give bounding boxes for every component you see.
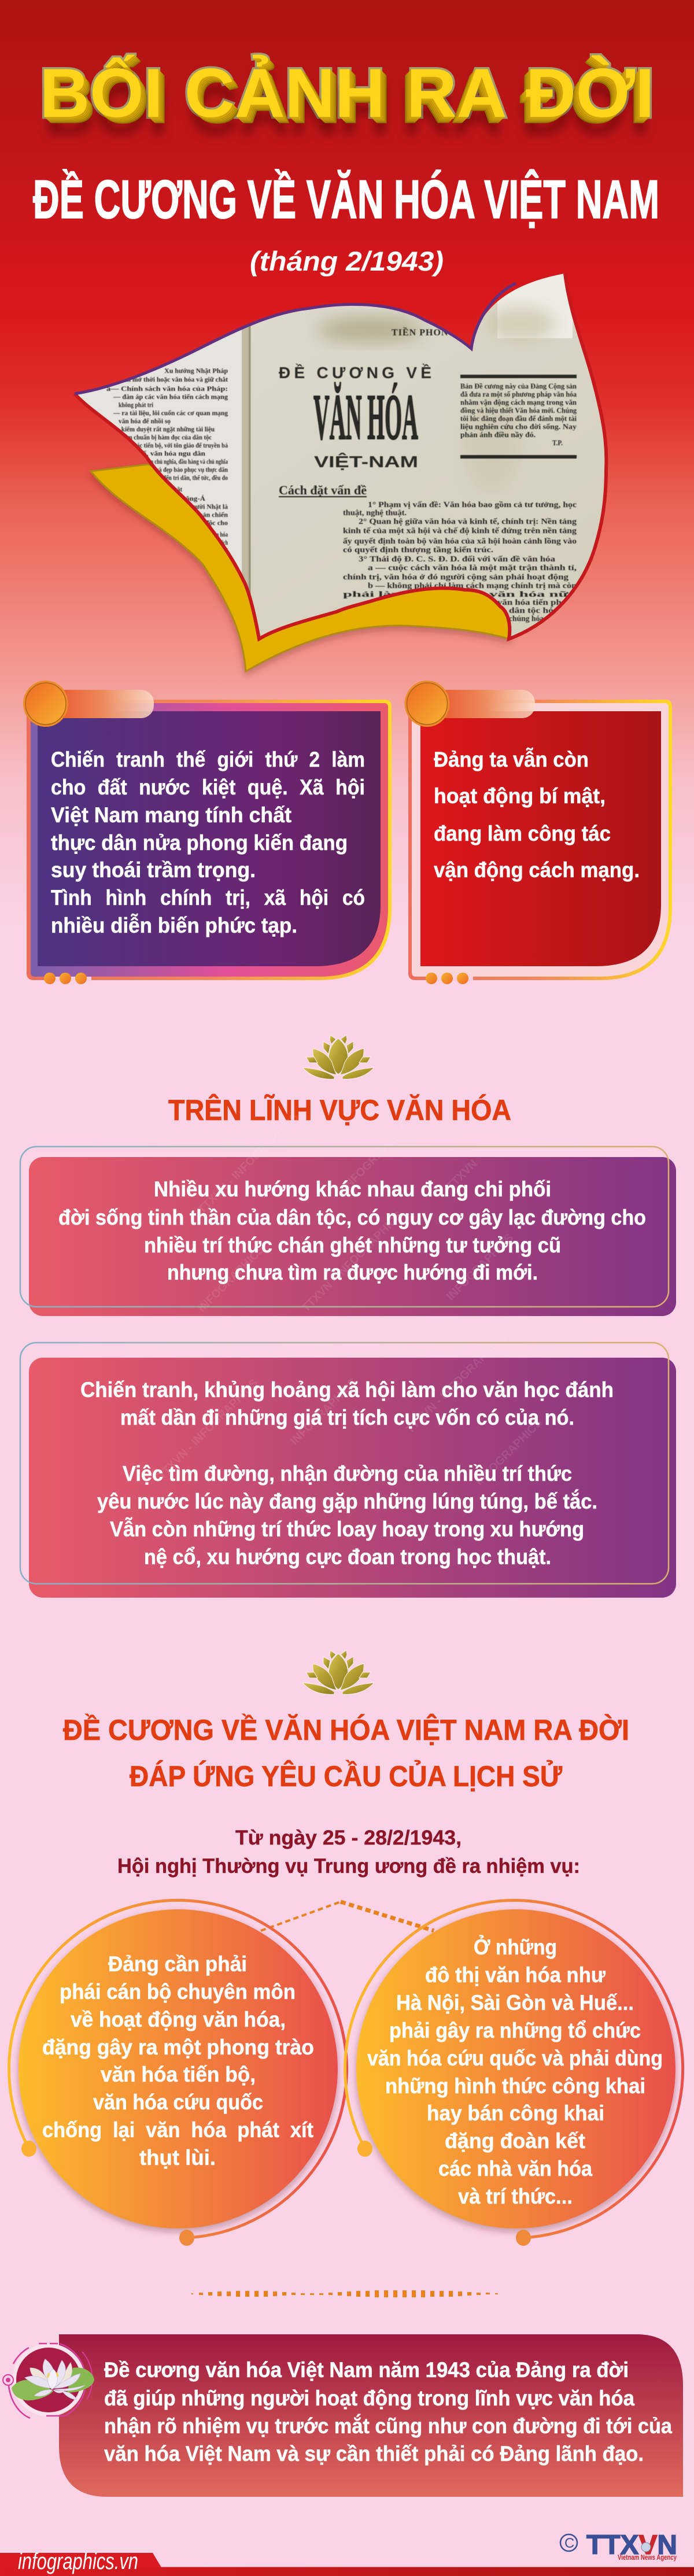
- newspaper scan: kinh tế của một xã hội và chế độ kinh tế đứng trên nền tảng: [343, 526, 577, 535]
- newspaper scan: — ra tài liệu, lôi cuốn các cơ quan mạng: [113, 409, 228, 417]
- circle text: [367, 1935, 663, 2208]
- newspaper scan: Bản Đề cương này của Đảng Cộng sản: [460, 382, 577, 390]
- watermark: [195, 1111, 516, 1315]
- card body: [420, 711, 661, 966]
- date line: (tháng 2/1943): [250, 246, 444, 276]
- newspaper scan: chúng hóa vận động: [509, 614, 577, 623]
- newspaper scan: a— Chính sách văn hóa của Pháp:: [106, 385, 228, 393]
- newspaper scan: văn hóa để nhồi sọ: [119, 417, 171, 425]
- card text: hoạt động bí mật,: [434, 784, 606, 808]
- card text: Việt Nam mang tính chất: [51, 803, 291, 827]
- card text: Đảng ta vẫn còn: [434, 748, 589, 771]
- card text: Chiến tranh thế giới thứ 2 làm: [51, 748, 365, 771]
- circle text: các nhà văn hóa: [438, 2157, 592, 2180]
- icon: orange coin: [405, 681, 450, 727]
- newspaper scan: văn hóa tiến phong: [497, 598, 577, 607]
- watermark: INFOGRAPHICS: [473, 1417, 545, 1488]
- circle text: phái cán bộ chuyên môn: [60, 1980, 296, 2004]
- circle text: đặng đoàn kết: [445, 2129, 585, 2153]
- newspaper scan: quảng và đẹp bảo phục vụ thực dân: [139, 465, 228, 474]
- newspaper scan: nhằm vận động cách mạng trong văn: [460, 398, 577, 406]
- watermark: TTXVN - INFOGRAPHICS: [404, 1330, 510, 1436]
- box text: nệ cổ, xu hướng cực đoan trong học thuật.: [144, 1545, 551, 1569]
- newspaper scan: mặt khác tiến bộ, với tôn giáo để truyền bá: [119, 441, 228, 449]
- newspaper scan: mất văn hóa chí: [200, 555, 228, 563]
- newspaper scan: — kiểm duyệt rất ngặt những tài liệu: [113, 425, 215, 433]
- newspaper scan: Cách đặt vấn đề: [279, 483, 367, 497]
- newspaper scan: VIỆT-NAM: [314, 453, 418, 471]
- newspaper scan: dân tộc hóa, đại: [509, 606, 577, 615]
- box text: [58, 1177, 646, 1284]
- card text: [51, 748, 365, 937]
- newspaper scan: nghi, mất nghệ: [200, 546, 228, 555]
- box text: [80, 1378, 614, 1569]
- connector: dashed peak between circles: [261, 1902, 434, 1931]
- logo: TTXVN: C: [564, 2536, 574, 2551]
- box text: Nhiều xu hướng khác nhau đang chi phối: [154, 1177, 551, 1201]
- newspaper scan: 3° Thái độ Đ. C. S. Đ. D. đối với vấn đề văn hóa: [359, 555, 555, 563]
- circle text: Hà Nội, Sài Gòn và Huế...: [396, 1991, 634, 2015]
- newspaper scan: truyền chủ nghĩa, đầu hàng và chủ nghĩa: [139, 457, 228, 465]
- conclusion text: Đề cương văn hóa Việt Nam năm 1943 của Đảng ra đời: [104, 2358, 629, 2382]
- card frame: [408, 700, 672, 980]
- newspaper scan: phải mở thời hoặc văn hóa và giữ chắt: [118, 375, 228, 383]
- newspaper scan: tộc, cổng: [205, 563, 228, 571]
- icon: three dots: [44, 973, 87, 984]
- newspaper scan: văn hóa Nhật-bản chiến: [156, 511, 228, 519]
- newspaper scan: b — không phải chỉ làm cách mạng chính trị mà còn: [368, 581, 577, 590]
- card text: thực dân nửa phong kiến đang: [51, 831, 348, 855]
- newspaper scan: có quyết định thượng tầng kiến trúc.: [343, 545, 493, 554]
- watermark: TTXVN - INFOGRAPHICS: [195, 1111, 301, 1217]
- circle text: văn hóa tiến bộ,: [101, 2063, 256, 2086]
- logo: TTXVN: TTXVN: [586, 2529, 677, 2560]
- newspaper scan: 1° Phạm vị vấn đề: Văn hóa bao gồm cả tư tưởng, học: [368, 500, 577, 509]
- circle text: đặng gây ra một phong trào: [42, 2035, 314, 2059]
- tab: scroll bar: [52, 690, 154, 718]
- ring arc: [9, 1900, 347, 2238]
- circle text: đô thị văn hóa như: [425, 1963, 606, 1987]
- newspaper scan: nhân dân đến tri dân, thế tức, đều do: [139, 474, 228, 482]
- lily pads: [12, 2367, 94, 2400]
- newspaper scan: liệu nghiên cứu cho đời sống. Nay: [460, 423, 577, 431]
- newspaper scan: đặc phong cổ lịch: [194, 538, 228, 546]
- newspaper scan: đồng và hiệu thiết Văn hóa mới. Chúng: [460, 406, 577, 415]
- circle text: [42, 1952, 314, 2170]
- newspaper scan: không phát tri: [119, 401, 154, 409]
- newspaper scan: ĐỀ CƯƠNG VỀ: [279, 364, 431, 382]
- circle text: hay bán công khai: [427, 2101, 604, 2125]
- newspaper scan: Xu hướng Nhật Pháp: [164, 367, 228, 375]
- divider: tapered orange dots: [191, 2290, 498, 2297]
- icon: water lily badge: [3, 2344, 94, 2418]
- circle text: về hoạt động văn hóa,: [71, 2008, 286, 2031]
- box text: Việc tìm đường, nhận đường của nhiều trí thức: [123, 1462, 572, 1485]
- watermark: INFOGRAPHICS: [288, 1376, 360, 1448]
- box text: nhưng chưa tìm ra được hướng đi mới.: [167, 1261, 538, 1284]
- circle text: Đảng cần phải: [108, 1952, 247, 1976]
- tab: scroll bar: [434, 690, 535, 718]
- card text: vận động cách mạng.: [434, 858, 640, 882]
- icon: gold lotus: [302, 1035, 374, 1079]
- newspaper scan: mang cổ, văn hóa ngu dân: [119, 449, 205, 457]
- conclusion text: văn hóa Việt Nam và sự cần thiết phải có Đảng lãnh đạo.: [104, 2442, 644, 2466]
- card text: đang làm công tác: [434, 822, 611, 845]
- footer: red band and site tab: infographics.vn: [18, 2549, 138, 2574]
- conclusion text: [104, 2358, 672, 2466]
- panel: left task circle: [9, 1900, 347, 2246]
- box text: mất dần đi những giá trị tích cực vốn có của nó.: [120, 1406, 574, 1429]
- newspaper scan: hóa của Nhật: [147, 485, 182, 493]
- newspaper scan: T.P.: [552, 439, 563, 447]
- card text: [434, 748, 640, 882]
- watermark: [155, 1330, 545, 1488]
- newspaper scan: chính trị, văn hóa ở đó người cộng sản phải hoạt động: [343, 572, 569, 581]
- circle text: thụt lùi.: [139, 2146, 216, 2170]
- newspaper scan: — đàn áp các văn hóa tiến cách mạng: [113, 393, 228, 401]
- circle text: và trí thức...: [458, 2185, 573, 2208]
- card colour band: [31, 703, 388, 977]
- newspaper scan: 2° Quan hệ giữa văn hóa và kinh tế, chính trị: Nền tảng: [359, 517, 577, 526]
- card text: cho đất nước kiệt quệ. Xã hội: [51, 775, 365, 799]
- purple edge of the newspaper: [75, 283, 516, 394]
- newspaper scan: nghĩa Đại Đông-Á: [147, 494, 205, 502]
- panel: war impact box: [20, 1330, 676, 1598]
- heading: document birth: [63, 1714, 629, 1793]
- newspaper scan: chính: [208, 572, 228, 580]
- newspaper scan: a — cuộc cách văn hóa là một mặt trận thành tỉ,: [368, 563, 577, 572]
- card colour band: [412, 703, 669, 977]
- panel: right task circle: [345, 1900, 683, 2246]
- newspaper scan: nghệ nhận người Nhật là: [156, 502, 228, 511]
- intro text: conference: [117, 1827, 580, 1878]
- footer: red band and site tab: [0, 2549, 694, 2576]
- intro text: conference: Từ ngày 25 - 28/2/1943,: [235, 1827, 462, 1849]
- newspaper scan: — nêm chuẩn bị hàm đọc của dân tộc: [113, 433, 212, 441]
- box text: nhiều trí thức chán ghét những tư tưởng cũ: [144, 1233, 561, 1257]
- circle text: văn hóa cứu quốc và phải dùng: [367, 2046, 663, 2070]
- card text: nhiều diễn biến phức tạp.: [51, 914, 297, 937]
- heading: document birth: ĐỀ CƯƠNG VỀ VĂN HÓA VIỆT NAM RA ĐỜI: [63, 1714, 629, 1746]
- white lotus petals: [25, 2359, 85, 2400]
- newspaper scan: nhất, Đầu độc cho: [174, 519, 228, 527]
- heading: document birth: ĐÁP ỨNG YÊU CẦU CỦA LỊCH SỬ: [130, 1760, 562, 1793]
- circle text: chống lại văn hóa phát xít: [42, 2118, 313, 2142]
- newspaper scan: phản ánh điều nầy đó.: [460, 431, 536, 439]
- box text: Vẫn còn những trí thức loay hoay trong xu hướng: [110, 1517, 584, 1541]
- icon: three dots: [426, 973, 468, 984]
- card text: Tình hình chính trị, xã hội có: [51, 886, 365, 910]
- conclusion text: đã giúp những người hoạt động trong lĩnh vực văn hóa: [104, 2386, 634, 2410]
- newspaper scan: tôi lúc đăng đoạn đầu để đánh một tài: [460, 415, 577, 423]
- panel: conclusion: [59, 2334, 683, 2497]
- panel: trends box: [20, 1111, 676, 1316]
- notch in bottom stripe: [45, 977, 91, 981]
- card text: suy thoái trầm trọng.: [51, 858, 256, 882]
- box text: Chiến tranh, khủng hoảng xã hội làm cho văn học đánh: [80, 1378, 614, 1402]
- box text: đời sống tinh thần của dân tộc, có nguy cơ gây lạc đường cho: [58, 1206, 646, 1229]
- watermark: INFOGRAPHICS: [340, 1122, 412, 1193]
- newspaper scan: thuật, nghệ thuật.: [343, 508, 407, 517]
- watermark: INFOGRAPHICS: [195, 1243, 267, 1315]
- circle text: Ở những: [474, 1935, 557, 1959]
- card body: [38, 711, 381, 966]
- watermark: TTXVN - INFOGRAPHICS: [155, 1377, 261, 1483]
- watermark: TTXVN: [444, 1158, 480, 1193]
- newspaper scan: phải làm cách mạng văn hóa nữa: [343, 590, 577, 598]
- icon: orange coin: [23, 681, 68, 727]
- newspaper scan: [69, 269, 613, 645]
- newspaper scan: VĂN HÓA: [313, 382, 418, 453]
- panel: war context card: [23, 681, 392, 984]
- gold back page: [91, 464, 520, 671]
- title: 3D golden headline: BỐI CẢNH RA ĐỜI: [39, 54, 655, 132]
- notch in bottom stripe: [427, 977, 473, 981]
- newspaper scan: gọi tiêu văn hóa: [194, 530, 228, 538]
- illustration: newspaper page on gold and red book: [69, 269, 613, 671]
- newspaper scan: TIỀN PHONG: [392, 327, 456, 338]
- box text: yêu nước lúc này đang gặp những lúng túng, bế tắc.: [97, 1489, 597, 1513]
- ring end dots: [357, 2141, 531, 2246]
- card frame: [27, 700, 392, 980]
- watermark: TTXVN - INFOGRAPHICS: [300, 1209, 405, 1315]
- circle text: những hình thức công khai: [385, 2074, 645, 2098]
- circle text: phải gây ra những tổ chức: [389, 2019, 641, 2042]
- ring arc: [345, 1900, 683, 2238]
- red edge of the newspaper: [75, 274, 606, 639]
- panel: party context card: [405, 681, 672, 984]
- ring end dots: [21, 2141, 194, 2246]
- newspaper scan: đã đưa ra một số phương pháp văn hóa: [460, 390, 577, 398]
- heading: culture field: TRÊN LĨNH VỰC VĂN HÓA: [168, 1094, 511, 1126]
- newspaper scan: ấy quyết định toàn bộ văn hóa của xã hội hoàn cảnh lồng vào: [343, 537, 577, 545]
- icon: gold lotus: [302, 1650, 374, 1694]
- watermark: INFOGRAPHICS: [444, 1232, 516, 1303]
- logo: TTXVN: Vietnam News Agency: [618, 2553, 677, 2562]
- intro text: conference: Hội nghị Thường vụ Trung ương đề ra nhiệm vụ:: [117, 1855, 580, 1878]
- circle text: văn hóa cứu quốc: [93, 2090, 263, 2114]
